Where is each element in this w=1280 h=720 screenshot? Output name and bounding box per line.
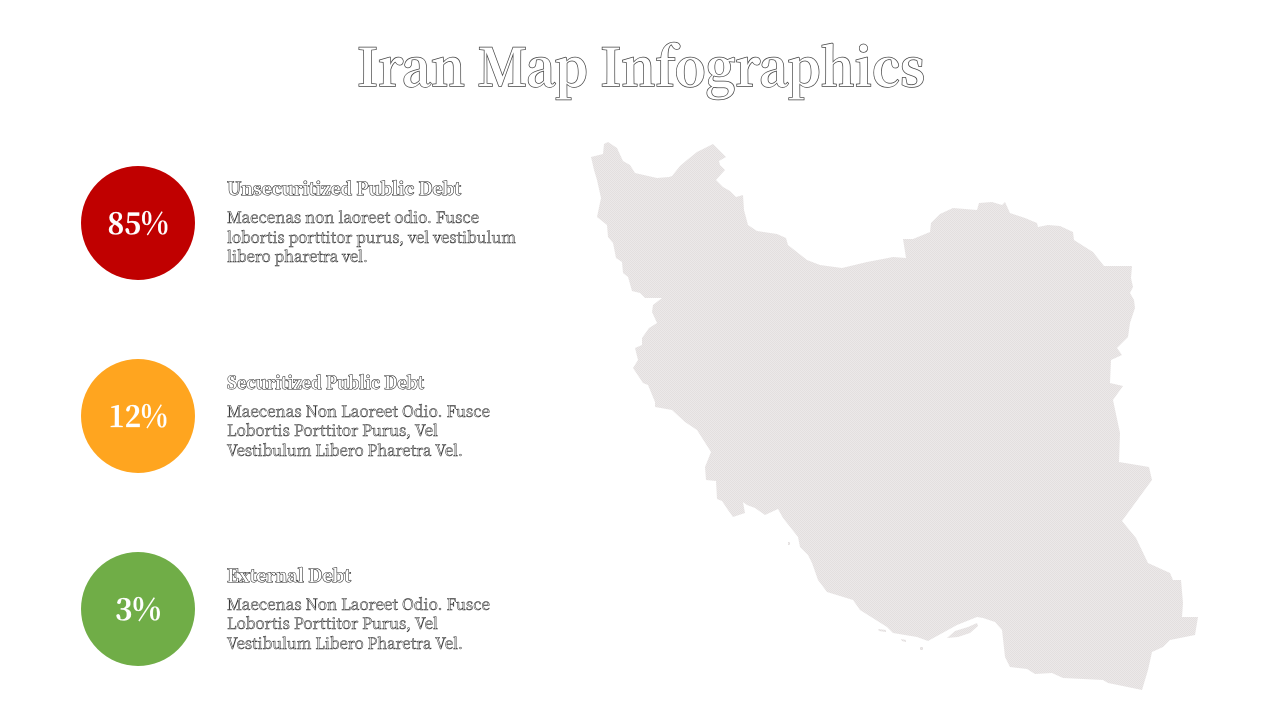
text block 2 — [227, 400, 490, 461]
badge: 3%: 3% — [115, 585, 161, 629]
text block 3: Vestibulum Libero Pharetra Vel. — [227, 632, 463, 654]
text block 1: Maecenas non laoreet odio. Fusce — [227, 206, 479, 228]
badge: 85%: 85% — [108, 199, 168, 243]
map: Iran silhouette — [591, 142, 1198, 690]
heading 2: Securitized Public Debt — [227, 369, 424, 395]
item 1: unsecuritized public debt — [81, 166, 516, 280]
text block 3 — [227, 593, 490, 654]
text block 1 — [227, 206, 516, 267]
text block 1: lobortis porttitor purus, vel vestibulum — [227, 226, 516, 248]
text block 2: Maecenas Non Laoreet Odio. Fusce — [227, 400, 490, 422]
badge: 12%: 12% — [108, 392, 168, 436]
text block 2: Vestibulum Libero Pharetra Vel. — [227, 439, 463, 461]
heading 3: External Debt — [227, 562, 351, 588]
text block 2: Lobortis Porttitor Purus, Vel — [227, 419, 438, 441]
text block 3: Lobortis Porttitor Purus, Vel — [227, 612, 438, 634]
item 3: external debt — [81, 552, 490, 666]
badge: 3% — [81, 552, 195, 666]
text block 1: libero pharetra vel. — [227, 245, 368, 267]
badge: 12% — [81, 359, 195, 473]
item 2: securitized public debt — [81, 359, 490, 473]
badge: 85% — [81, 166, 195, 280]
title: Iran Map Infographics — [357, 26, 925, 101]
heading 1: Unsecuritized Public Debt — [227, 175, 461, 201]
text block 3: Maecenas Non Laoreet Odio. Fusce — [227, 593, 490, 615]
